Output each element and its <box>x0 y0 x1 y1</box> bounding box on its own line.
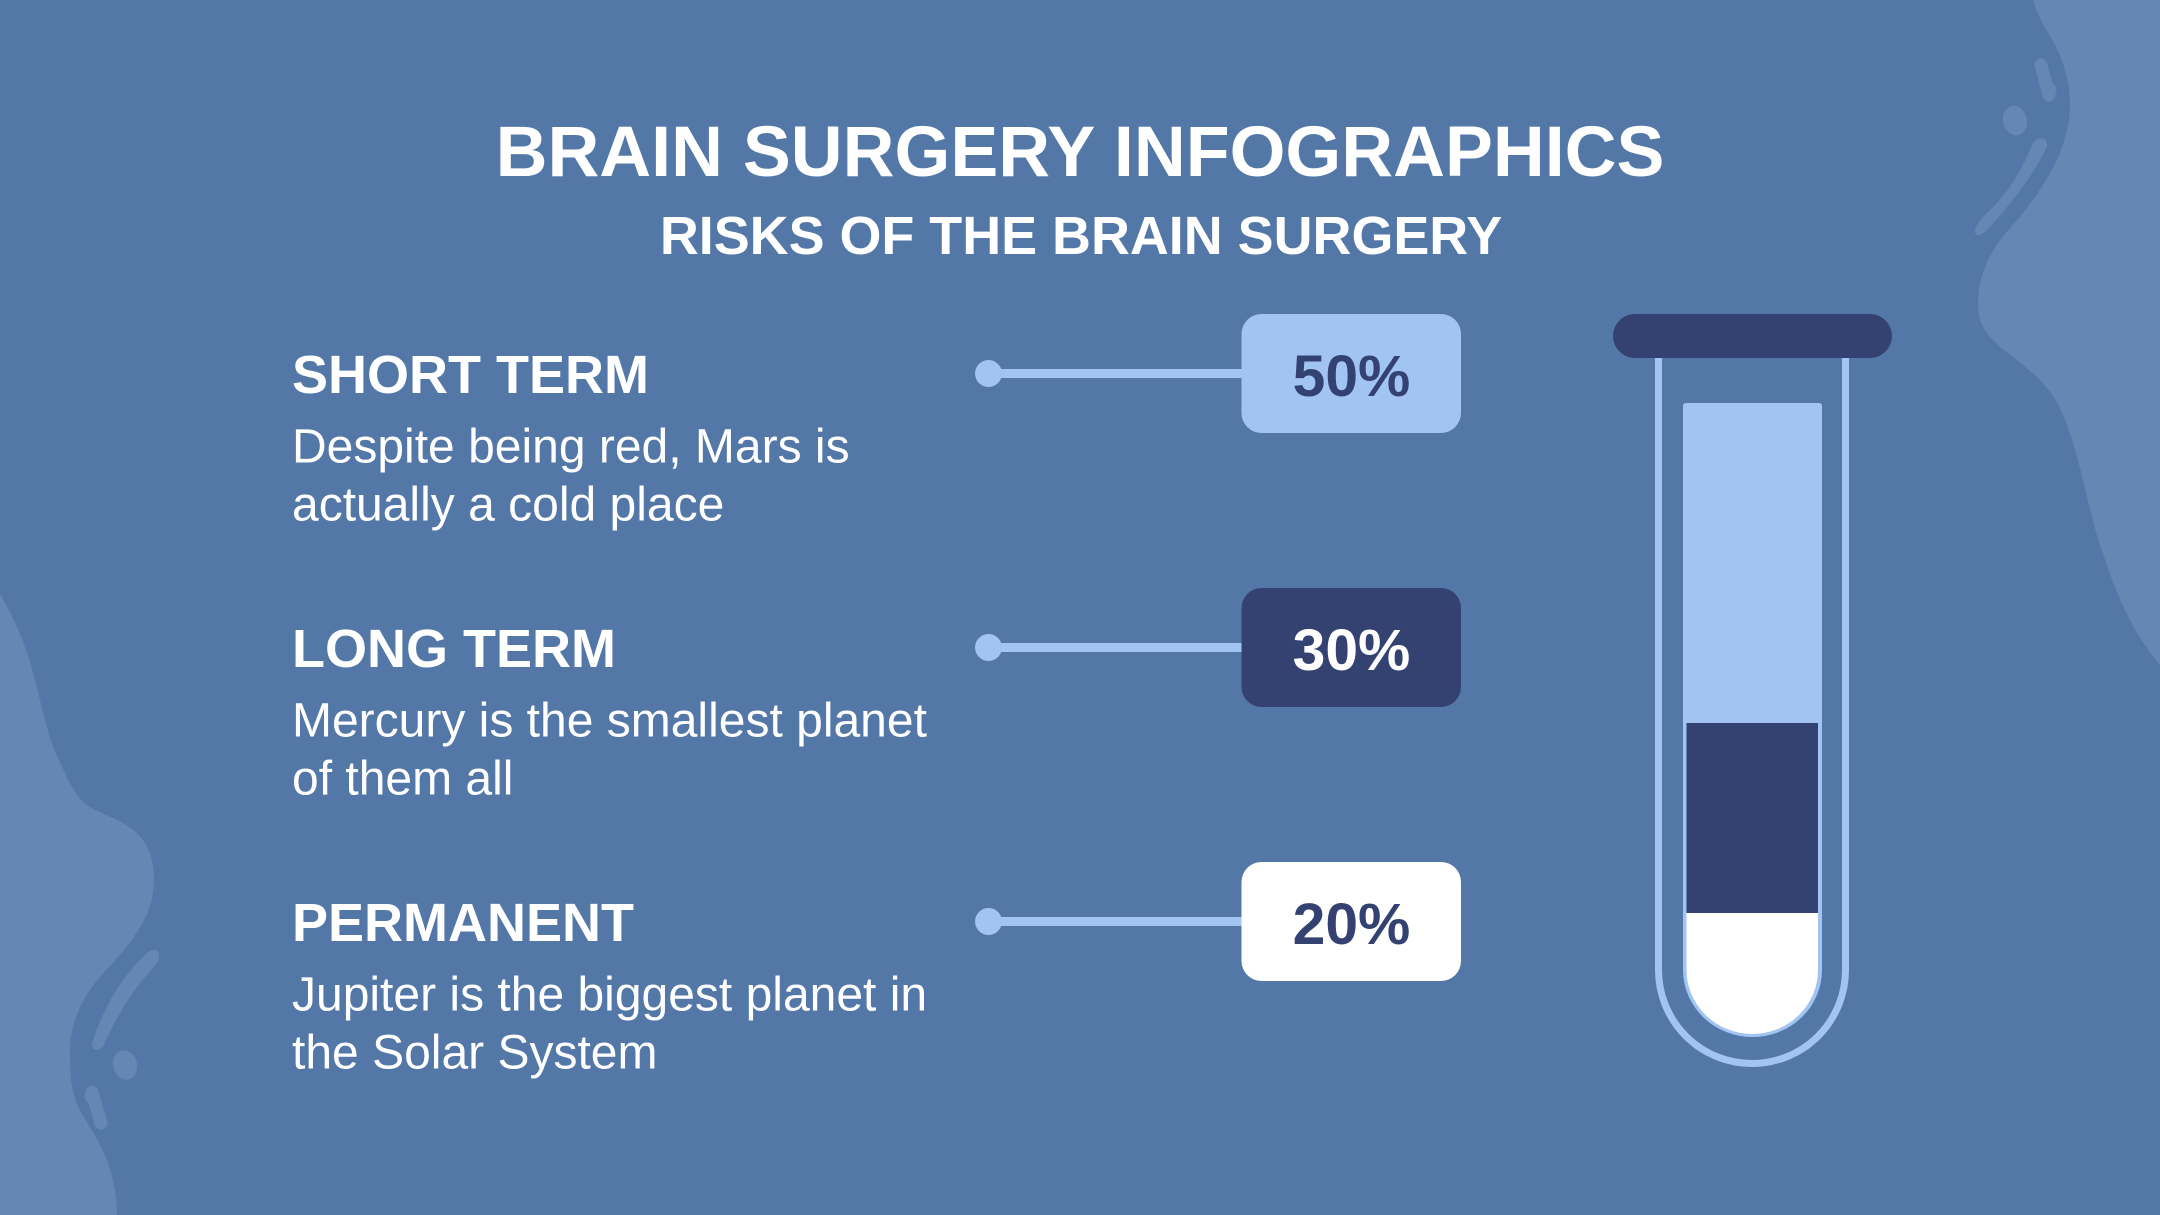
badge: 50%: 50% <box>1293 344 1410 409</box>
liquid segment: 50% <box>1683 403 1822 1037</box>
subtitle: RISKS OF THE BRAIN SURGERY <box>660 206 1502 266</box>
text block: permanent: PERMANENT <box>292 893 634 953</box>
connector: permanent <box>975 908 1244 935</box>
liquid segment: 30% <box>1686 723 1818 913</box>
background blob: top right <box>1975 0 2160 665</box>
tube cap <box>1613 314 1892 358</box>
liquid segment: 20% <box>1686 913 1818 1034</box>
text block: long term: LONG TERM <box>292 619 616 679</box>
badge: 30%: 30% <box>1293 618 1410 683</box>
text block: short term: Despite being red, Mars is <box>292 420 850 474</box>
title: BRAIN SURGERY INFOGRAPHICS <box>496 112 1664 192</box>
tube outline <box>1658 340 1846 1064</box>
text block: permanent <box>292 893 927 1080</box>
text block: long term: of them all <box>292 752 513 806</box>
text block: short term <box>292 345 850 532</box>
badge: 30% <box>1242 588 1461 707</box>
badge: 20%: 20% <box>1293 892 1410 957</box>
badge: 50% <box>1242 314 1461 433</box>
text block: short term: actually a cold place <box>292 478 724 532</box>
connector: short term <box>975 360 1244 387</box>
text block: long term <box>292 619 927 806</box>
background blob: bottom left <box>0 594 159 1215</box>
badge: 20% <box>1242 862 1461 981</box>
text block: permanent: the Solar System <box>292 1026 657 1080</box>
text block: short term: SHORT TERM <box>292 345 649 405</box>
test tube chart <box>1613 314 1892 1064</box>
text block: permanent: Jupiter is the biggest planet in <box>292 968 927 1022</box>
connector: long term <box>975 634 1244 661</box>
text block: long term: Mercury is the smallest planet <box>292 694 927 748</box>
